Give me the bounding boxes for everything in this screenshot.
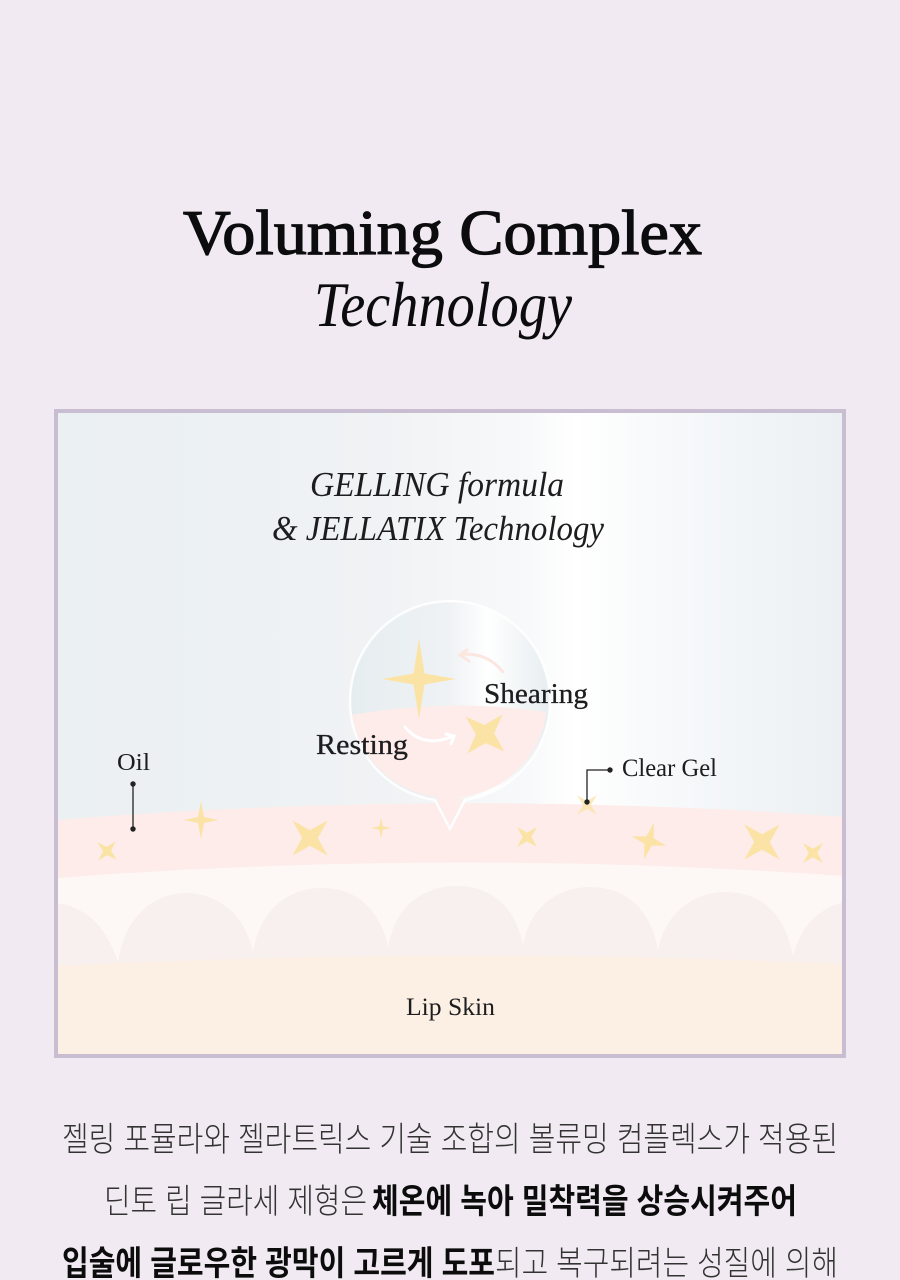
label: shearing: Shearing <box>484 678 588 710</box>
label: resting: Resting <box>316 729 408 761</box>
tilted star <box>448 697 522 771</box>
panel: gelling formula diagram <box>56 411 844 1056</box>
panel heading: & JELLATIX Technology <box>272 509 604 548</box>
gel layer band <box>56 803 844 880</box>
label: oil: Oil <box>117 750 150 776</box>
lip skin layer <box>56 955 844 1056</box>
bubble body <box>350 601 550 829</box>
bubble tail fill <box>436 798 464 826</box>
large star <box>382 639 456 719</box>
skin cells <box>58 886 842 966</box>
panel background <box>58 413 842 1054</box>
arrow: resting <box>405 727 454 744</box>
label: oil <box>117 750 150 832</box>
title <box>183 197 702 340</box>
description text: 체온에 녹아 밀착력을 상승시켜주어 <box>372 1183 797 1221</box>
small stars row <box>89 833 125 869</box>
lip layers <box>56 803 844 1056</box>
label: clear gel: Clear Gel <box>622 755 717 782</box>
panel heading: GELLING formula <box>310 465 564 504</box>
bubble gel fill <box>352 706 546 798</box>
cream layer <box>58 862 842 962</box>
label: lip skin: Lip Skin <box>406 994 496 1021</box>
label: clear gel <box>584 755 717 805</box>
title: Technology <box>314 269 573 340</box>
magnifier bubble <box>345 601 553 829</box>
description text: 딘토 립 글라세 제형은 <box>104 1183 367 1221</box>
panel heading <box>272 465 604 548</box>
gel stars <box>89 785 833 877</box>
title: Voluming Complex <box>183 197 702 268</box>
arrow: shearing <box>460 650 503 672</box>
description text <box>62 1121 838 1280</box>
panel border <box>56 411 844 1056</box>
